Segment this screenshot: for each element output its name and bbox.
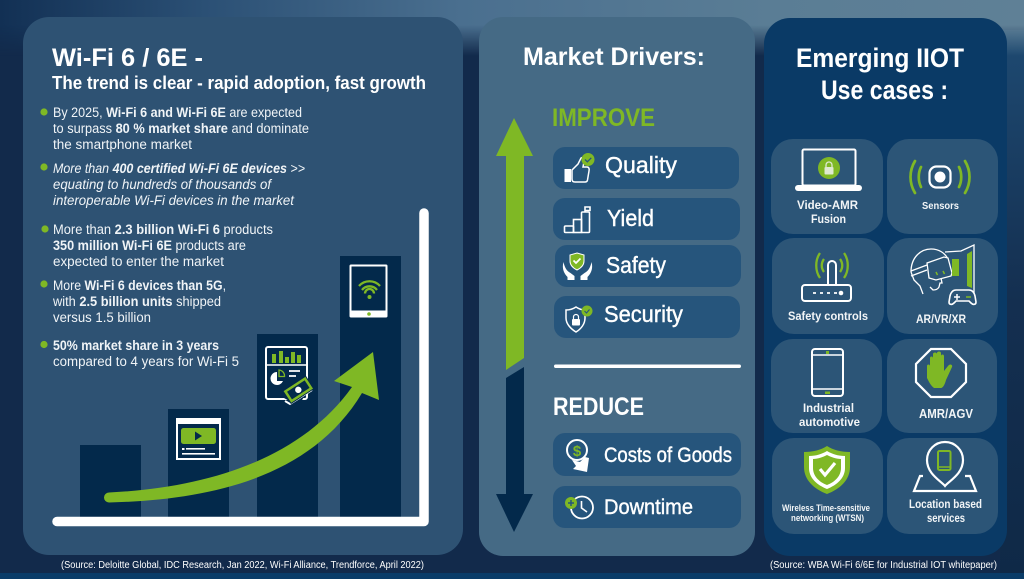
tile: industrial automotive: Industrial <box>803 401 854 415</box>
growth arrow <box>104 352 379 502</box>
bullet: products: expected to enter the market <box>53 254 224 269</box>
panel: market drivers <box>479 17 755 556</box>
bullet: products: More than 2.3 billion Wi-Fi 6 products <box>53 222 273 237</box>
divider <box>554 364 741 368</box>
pill: security <box>554 296 740 338</box>
icon: hands holding shield <box>563 253 592 280</box>
icon: router with signal <box>802 253 851 301</box>
bullet: market share speed: 50% market share in 3 years <box>53 338 219 353</box>
subheading: the trend: The trend is clear - rapid adoption, fast growth <box>52 73 426 93</box>
source: right panel: (Source: WBA Wi-Fi 6/6E for Industrial IOT whitepaper) <box>770 560 997 571</box>
label: reduce: REDUCE <box>553 393 644 421</box>
icon: laptop with lock <box>795 150 862 191</box>
heading: emerging IIOT: Emerging IIOT <box>796 43 964 73</box>
bullet: 2025 share: the smartphone market <box>53 137 192 152</box>
icon: VR headset with controller <box>911 245 976 304</box>
icon: rising steps with flag <box>564 207 590 232</box>
icon: stop sign with hand <box>916 349 966 397</box>
tile: AR/VR/XR <box>887 238 998 334</box>
bullet: certified devices: More than 400 certified Wi-Fi 6E devices >> <box>53 161 305 176</box>
pill: quality: Quality <box>605 152 677 178</box>
bullet: certified devices: equating to hundreds of thousands of <box>53 177 272 192</box>
bullet: versus 5G: with 2.5 billion units shipped <box>52 294 221 309</box>
pill: safety: Safety <box>606 252 666 278</box>
pill: downtime <box>553 486 741 528</box>
tile: industrial automotive <box>771 339 882 433</box>
tile: AR/VR/XR: AR/VR/XR <box>916 312 966 326</box>
arrow: improve up <box>496 118 533 370</box>
growth bar chart <box>57 213 424 522</box>
tile: AMR/AGV <box>887 339 997 433</box>
pill: costs of goods <box>553 433 741 476</box>
tile: video-AMR fusion: Video-AMR <box>797 198 858 212</box>
bullet: market share speed: compared to 4 years for Wi-Fi 5 <box>53 354 239 369</box>
bullet: certified devices: interoperable Wi-Fi devices in the market <box>53 193 295 208</box>
tile: sensors <box>887 139 998 234</box>
tile: safety controls <box>772 238 884 334</box>
tile: industrial automotive: automotive <box>799 415 860 429</box>
bullet: products <box>41 222 273 269</box>
pill: downtime: Downtime <box>604 496 693 519</box>
tile: safety controls: Safety controls <box>788 309 868 323</box>
panel: emerging IIOT use cases <box>764 18 1007 556</box>
bullet: certified devices <box>40 161 305 208</box>
icon: clock with plus badge <box>565 496 593 518</box>
bullet: versus 5G: More Wi-Fi 6 devices than 5G, <box>53 278 226 293</box>
icon: report with money <box>266 347 314 404</box>
bullet: products: 350 million Wi-Fi 6E products are <box>53 238 246 253</box>
tile: video-AMR fusion <box>771 139 883 234</box>
bullet: market share speed <box>40 338 239 369</box>
icon: green shield with check <box>804 446 850 494</box>
bullet: 2025 share <box>40 105 309 152</box>
tile: AMR/AGV: AMR/AGV <box>919 407 974 421</box>
tile: wireless TSN: Wireless Time-sensitive <box>782 503 870 513</box>
tile: location based services: services <box>927 511 965 525</box>
heading: market drivers: Market Drivers: <box>523 43 705 71</box>
pill: costs of goods: Costs of Goods <box>604 444 732 467</box>
tile: wireless TSN: networking (WTSN) <box>791 513 864 523</box>
panel: Wi-Fi 6 / 6E trend <box>23 17 463 555</box>
icon: thumbs up <box>564 153 594 182</box>
tile: video-AMR fusion: Fusion <box>811 212 846 226</box>
chart axes <box>57 213 424 522</box>
pill: quality <box>553 147 739 189</box>
bullet: versus 5G <box>40 278 226 325</box>
pill: safety <box>555 245 741 287</box>
icon: sensor with signal arcs <box>910 161 970 193</box>
tile: location based services: Location based <box>909 497 982 511</box>
tile: wireless TSN <box>772 438 883 534</box>
pill: yield: Yield <box>607 205 654 231</box>
label: improve: IMPROVE <box>552 104 655 132</box>
pill: security: Security <box>604 301 683 327</box>
heading: Wi-Fi 6 / 6E: Wi-Fi 6 / 6E - <box>52 44 203 72</box>
icon: tablet with Wi-Fi <box>350 264 388 318</box>
bullet: 2025 share: By 2025, Wi-Fi 6 and Wi-Fi 6E are expected <box>53 105 302 120</box>
icon: falling cost <box>567 440 589 472</box>
icon: map pin with tablet <box>914 442 976 491</box>
arrow: reduce down <box>496 367 533 532</box>
bullet: 2025 share: to surpass 80 % market share and dominate <box>53 121 309 136</box>
icon: shield with padlock <box>566 306 592 332</box>
tile: sensors: Sensors <box>922 200 959 212</box>
tile: location based services <box>887 438 998 534</box>
icon: video screen <box>176 418 221 460</box>
icon: handheld device <box>812 349 843 396</box>
icon: falling cost: $ <box>573 443 582 460</box>
heading: use cases: Use cases : <box>821 75 948 105</box>
bullet: versus 5G: versus 1.5 billion <box>53 310 151 325</box>
pill: yield <box>553 198 740 240</box>
source: left panel: (Source: Deloitte Global, IDC Research, Jan 2022, Wi-Fi Alliance, Trendforce, April 2022) <box>61 560 424 571</box>
